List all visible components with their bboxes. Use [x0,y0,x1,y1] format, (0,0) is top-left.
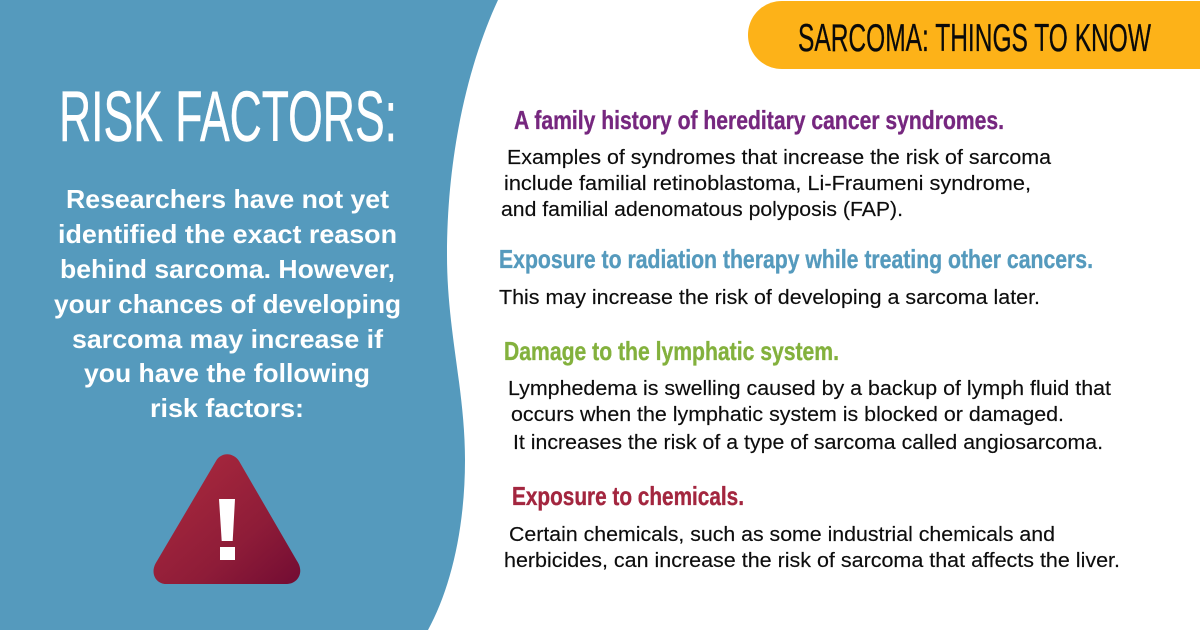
risk factor: chemicals: herbicides, can increase the risk of sarcoma that affects the liver. [504,549,1120,572]
risk factor: chemicals: Exposure to chemicals. [512,481,744,511]
risk factor: lymphatic damage: It increases the risk of a type of sarcoma called angiosarcoma. [513,431,1103,454]
risk factor: radiation therapy: This may increase the risk of developing a sarcoma later. [499,286,1040,309]
text block: introduction: identified the exact reason [58,219,397,249]
banner: sarcoma things to know [748,1,1200,69]
risk factor: radiation therapy [499,244,1093,309]
text block: introduction: risk factors: [150,393,304,423]
text block: introduction: behind sarcoma. However, [60,254,395,284]
risk factor: lymphatic damage: Lymphedema is swelling caused by a backup of lymph fluid that [508,377,1111,400]
risk factor: lymphatic damage: occurs when the lymphatic system is blocked or damaged. [511,403,1064,426]
text block: introduction [54,184,401,423]
risk factor: family history: Examples of syndromes that increase the risk of sarcoma [507,146,1052,169]
risk factor: lymphatic damage [504,336,1111,454]
title: risk factors: RISK FACTORS: [59,78,397,157]
risk factor: chemicals [504,481,1120,572]
text block: introduction: Researchers have not yet [66,184,389,214]
risk factor: family history: A family history of hereditary cancer syndromes. [514,105,1004,135]
risk factor: family history [501,105,1052,221]
risk factor: family history: and familial adenomatous polyposis (FAP). [501,198,903,221]
icon: warning triangle [154,454,300,584]
text block: introduction: your chances of developing [54,289,401,319]
text block: introduction: you have the following [84,358,370,388]
panel: blue left wave [0,0,498,630]
risk factor: chemicals: Certain chemicals, such as some industrial chemicals and [509,523,1055,546]
risk factor: family history: include familial retinoblastoma, Li-Fraumeni syndrome, [504,172,1031,195]
text block: introduction: sarcoma may increase if [72,324,383,354]
risk factor: lymphatic damage: Damage to the lymphatic system. [504,336,839,366]
